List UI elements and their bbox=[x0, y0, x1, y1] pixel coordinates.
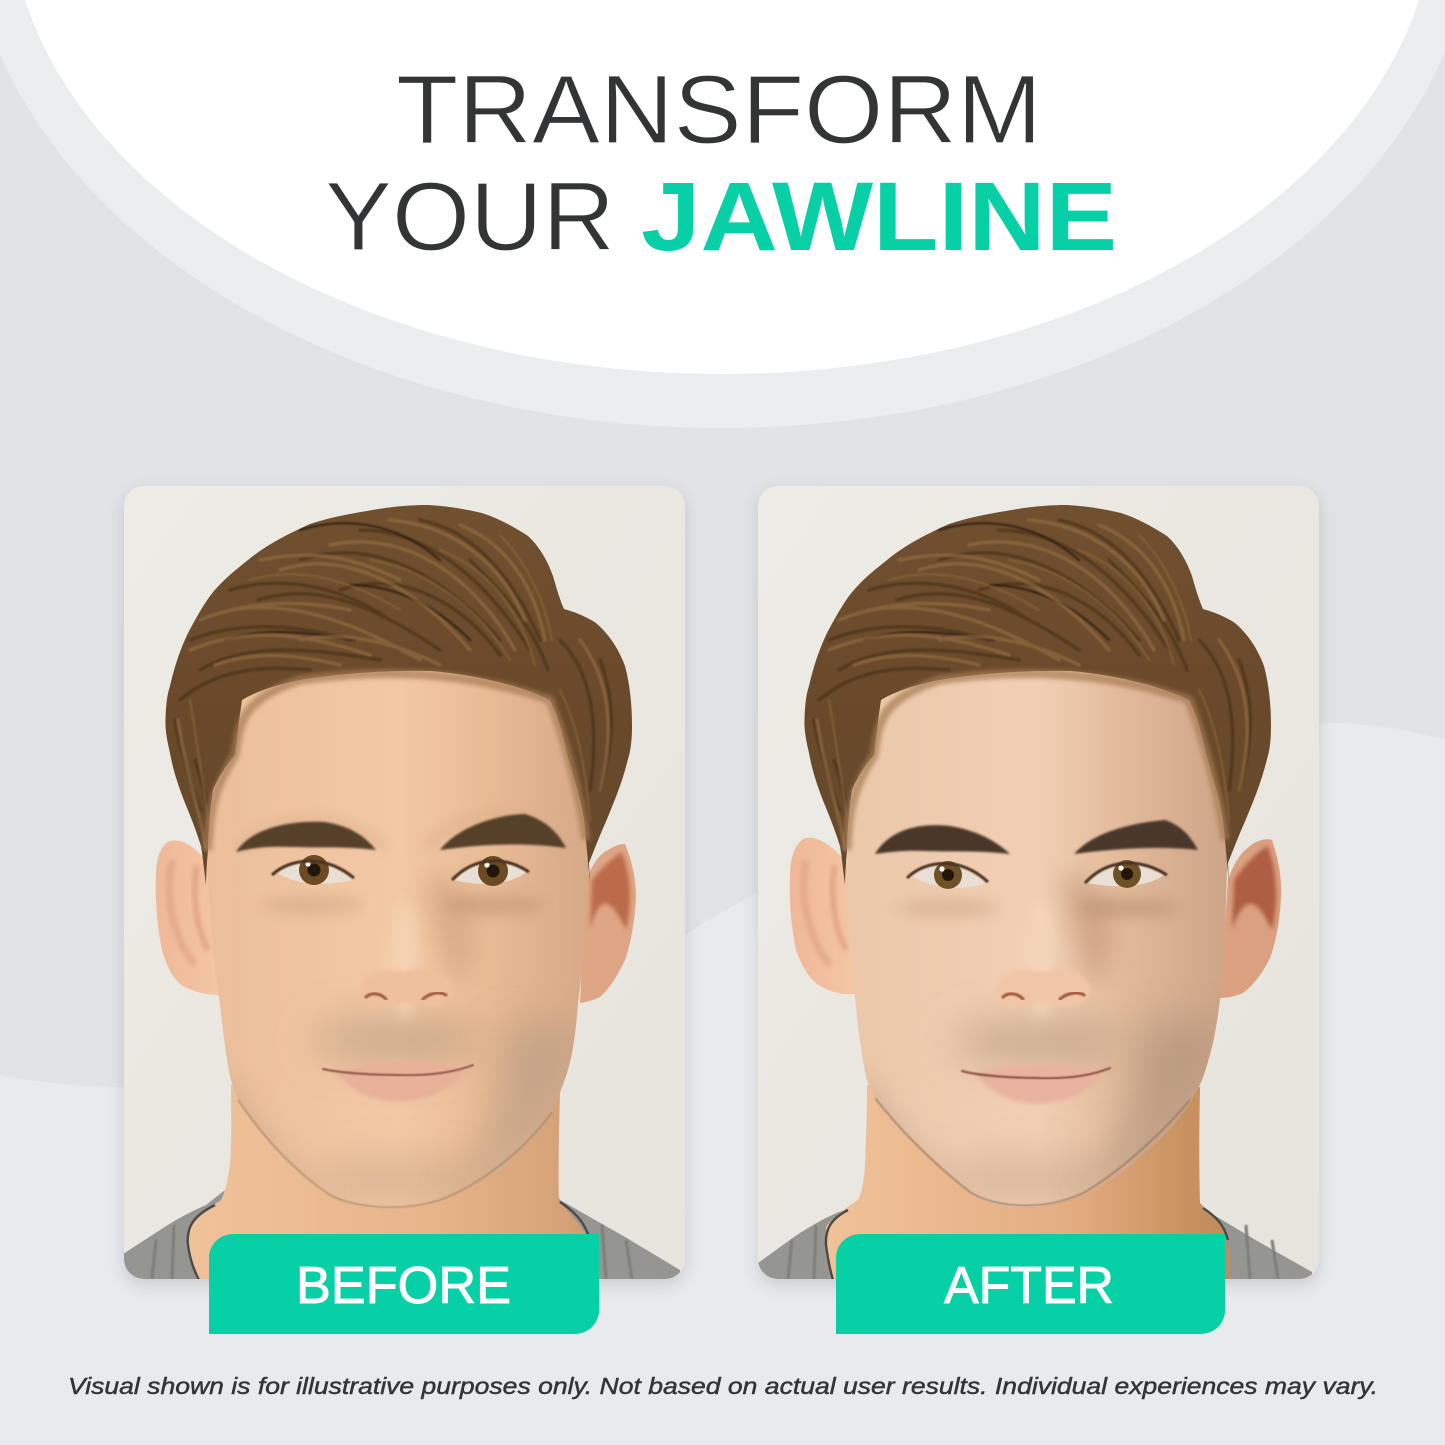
hairline softening bbox=[847, 674, 1225, 850]
ear right bbox=[580, 844, 636, 1003]
neck bbox=[826, 1085, 1230, 1285]
white header arc bbox=[9, 0, 1435, 374]
title line 1: TRANSFORM bbox=[396, 55, 1042, 164]
eyes bbox=[272, 855, 529, 886]
after label: AFTER bbox=[944, 1257, 1114, 1315]
panel: before photo bbox=[120, 486, 685, 1285]
mouth bbox=[962, 1064, 1110, 1104]
panel: after photo bbox=[758, 486, 1319, 1285]
before label: BEFORE bbox=[296, 1257, 511, 1315]
mouth bbox=[323, 1062, 473, 1102]
eyebrows bbox=[236, 814, 566, 852]
nose bbox=[998, 970, 1090, 1006]
eyes bbox=[907, 860, 1167, 889]
hair bbox=[165, 505, 632, 885]
collar line bbox=[826, 1208, 1228, 1280]
before label bbox=[209, 1234, 599, 1334]
photo card after bbox=[758, 486, 1319, 1279]
neck bbox=[188, 1085, 598, 1285]
photo card before bbox=[124, 486, 685, 1279]
ear left bbox=[790, 838, 855, 994]
facial shading bbox=[220, 816, 580, 1210]
eyebrows bbox=[875, 820, 1198, 854]
face bbox=[846, 650, 1228, 1207]
face bbox=[206, 650, 590, 1209]
after label bbox=[836, 1234, 1225, 1334]
title highlight: JAWLINE bbox=[641, 162, 1117, 271]
title line 2: YOUR bbox=[325, 162, 615, 271]
outer arc bbox=[0, 0, 1445, 428]
disclaimer: Visual shown is for illustrative purposes only. Not based on actual user results. Individual experiences may vary. bbox=[68, 1373, 1378, 1399]
shirt bbox=[120, 1190, 680, 1285]
jaw line bbox=[238, 1100, 552, 1207]
nose bbox=[364, 969, 448, 1004]
hair bbox=[804, 505, 1271, 885]
hairline softening bbox=[208, 674, 586, 850]
jaw line bbox=[875, 1098, 1190, 1206]
shirt bbox=[758, 1200, 1312, 1279]
facial shading bbox=[860, 876, 1220, 1205]
collar line bbox=[188, 1202, 590, 1280]
lower wave bbox=[0, 723, 1445, 1445]
ear left bbox=[156, 841, 219, 995]
ear right bbox=[1220, 839, 1281, 998]
title bbox=[325, 55, 1117, 271]
